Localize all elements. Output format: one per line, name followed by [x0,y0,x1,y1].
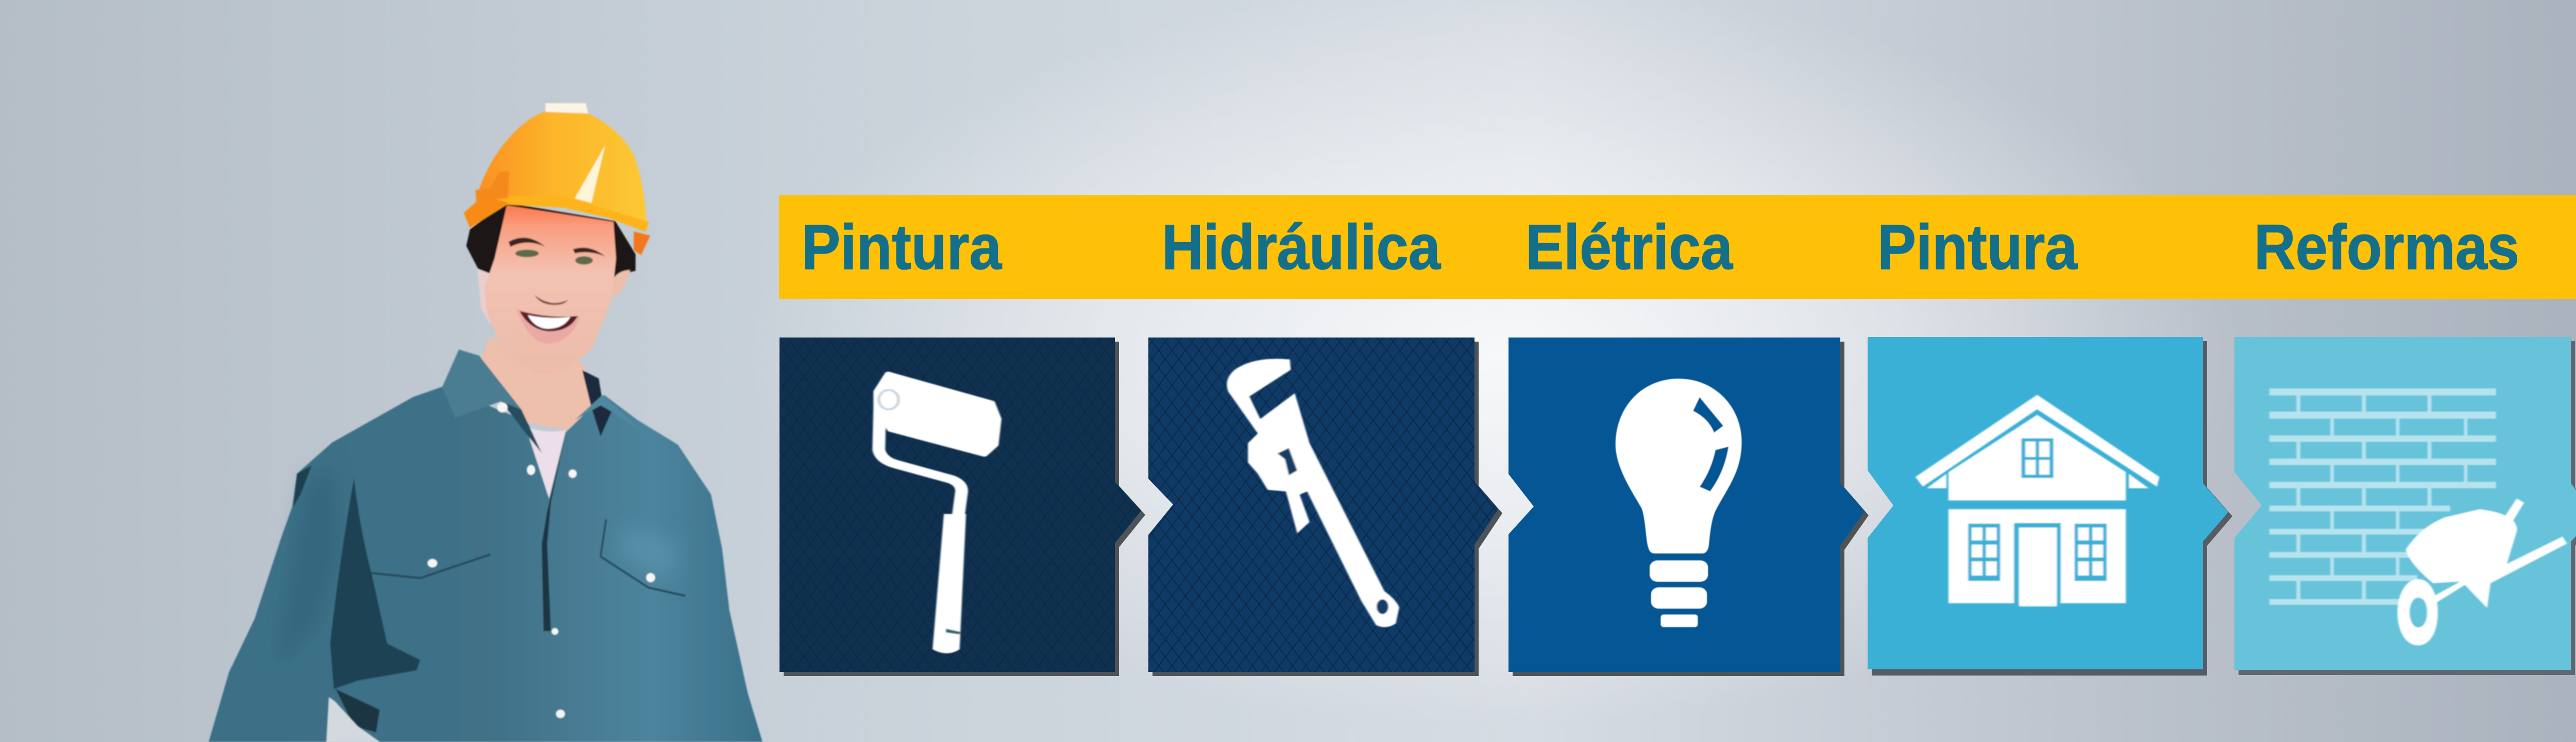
worker neck [481,337,595,430]
worker hair [466,203,636,292]
shirt collars [443,349,649,453]
worker eyebrows and eyes [509,238,605,264]
worker sideburn [477,269,494,325]
label: Pintura second: Pintura [1877,212,2078,283]
header bar [779,195,2576,299]
worker ear [610,270,630,298]
icon: wheelbarrow [2397,499,2567,645]
worker nose [534,295,568,305]
worker face [485,206,616,374]
icon: house [1916,395,2159,606]
icon: light bulb [1616,379,1742,627]
worker smile [517,309,580,344]
worker photo illustration [209,103,762,742]
panel: pipe wrench [1148,338,1502,676]
icon: paint roller [877,374,998,653]
icon: brick wall [2269,389,2496,605]
label: Hidráulica: Hidráulica [1162,212,1441,283]
icon: pipe wrench [1227,359,1399,627]
panel: house [1868,337,2232,676]
shirt soft shading [277,465,678,664]
shirt pockets [371,519,685,596]
yellow band [779,195,2576,299]
worker undershirt [524,426,566,499]
label: Elétrica: Elétrica [1526,212,1733,283]
label: Pintura: Pintura [802,212,1002,283]
worker shirt [209,387,762,742]
panel: bricks and wheelbarrow [2234,337,2576,675]
hard hat [464,103,650,255]
shirt shadow folds [293,370,612,733]
panel: painting roller [779,338,1145,676]
gap between arm and torso [327,697,380,742]
panel: light bulb [1509,338,1869,676]
shirt buttons [428,402,655,718]
label: Reformas: Reformas [2254,212,2519,283]
